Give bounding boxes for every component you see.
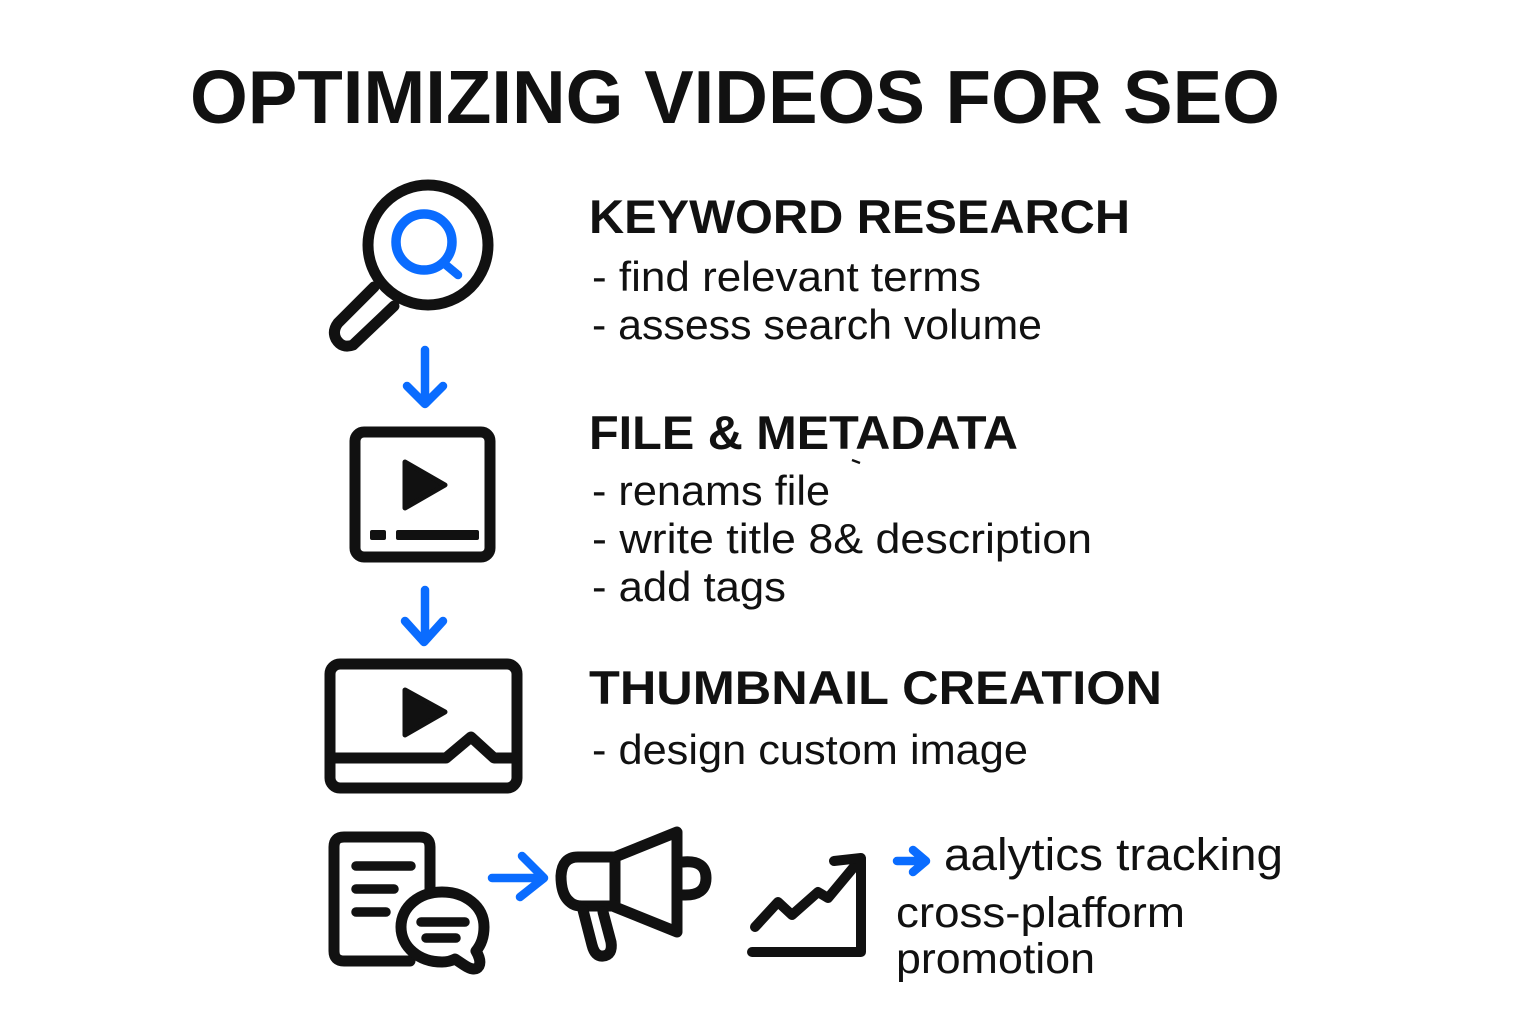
icon: megaphone (561, 832, 706, 956)
icon: video file (355, 432, 490, 557)
text block: keyword research: KEYWORD RESEARCH (589, 190, 1130, 243)
arrow: metadata to thumbnail (405, 590, 443, 642)
arrow: research to metadata (407, 350, 443, 404)
text block: thumbnail creation (589, 661, 1162, 773)
text block: thumbnail creation: - design custom image (592, 726, 1028, 773)
icon: document with speech bubble (334, 837, 484, 969)
icon: small blue arrow (897, 850, 926, 872)
text block: analytics and promotion (896, 829, 1283, 983)
arrow: document to megaphone (492, 856, 544, 897)
text block: thumbnail creation: THUMBNAIL CREATION (589, 661, 1162, 714)
text block: file and metadata: FILE & METADATA (589, 406, 1018, 459)
text block: analytics and promotion: promotion (896, 935, 1095, 983)
icon: magnifying glass (334, 185, 488, 346)
text block: analytics and promotion: aalytics tracking (944, 829, 1283, 880)
text block: keyword research (589, 190, 1130, 348)
title: OPTIMIZING VIDEOS FOR SEO (190, 55, 1280, 139)
text block: keyword research: - assess search volume (592, 301, 1042, 348)
text block: file and metadata: - renams file (592, 467, 830, 514)
text block: analytics and promotion: cross-plafform (896, 889, 1185, 937)
text block: file and metadata: - write title 8& description (592, 515, 1092, 562)
text block: file and metadata: - add tags (592, 563, 786, 610)
icon: thumbnail (330, 664, 517, 788)
icon: growth chart (752, 858, 861, 952)
text block: keyword research: - find relevant terms (592, 253, 981, 300)
text block: file and metadata (589, 406, 1092, 610)
